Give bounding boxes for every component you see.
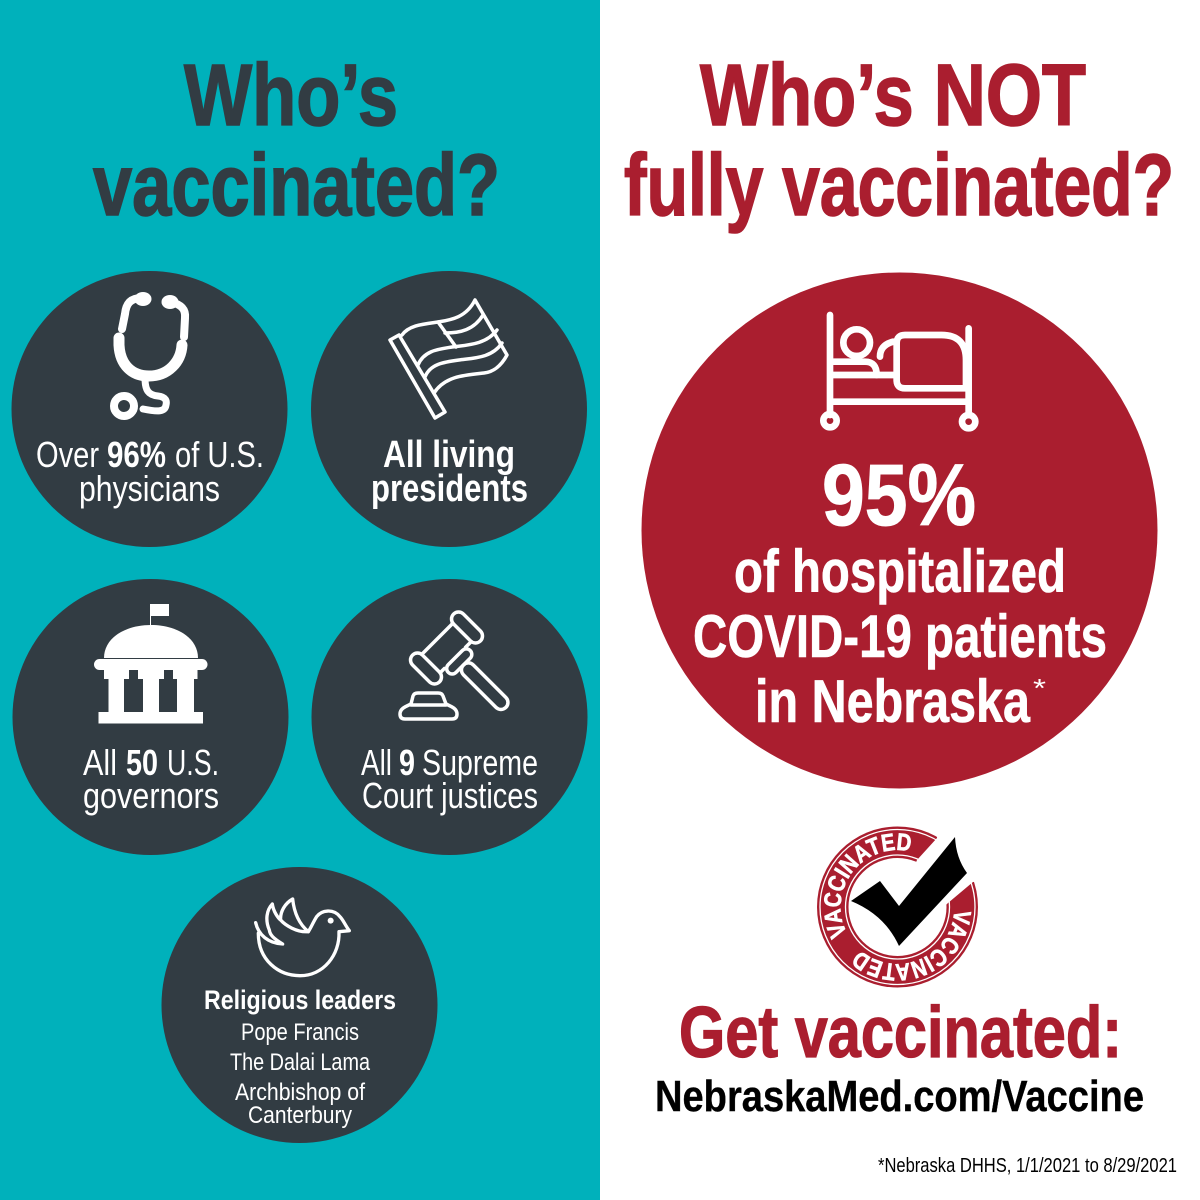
- text: all 9 supreme court justices: Court justices: [362, 775, 538, 816]
- text: all living presidents: presidents: [371, 468, 528, 510]
- text: religious leaders list: Religious leaders: [204, 985, 396, 1015]
- text: all 50 U.S. governors: All: [83, 742, 117, 783]
- text: all 9 supreme court justices: Supreme: [422, 742, 538, 783]
- text: all living presidents: All living: [383, 434, 515, 476]
- text: over 96% of U.S. physicians: Over: [36, 434, 99, 475]
- icon: flag: [390, 300, 507, 418]
- text: of hospitalized COVID-19 patients in Nebraska: [693, 538, 1107, 735]
- text: all 50 U.S. governors: 50: [126, 742, 158, 783]
- icon: vaccinated stamp: VACCINATED: [853, 912, 972, 981]
- text: all 9 supreme court justices: [361, 742, 538, 816]
- icon: vaccinated stamp: VACCINATED: [824, 833, 911, 940]
- text: all 50 U.S. governors: U.S.: [167, 742, 219, 783]
- text: religious leaders list: Pope Francis: [241, 1019, 359, 1046]
- text: religious leaders list: Archbishop of: [235, 1079, 365, 1106]
- text: religious leaders list: The Dalai Lama: [230, 1049, 371, 1076]
- text: over 96% of U.S. physicians: of U.S.: [175, 434, 264, 475]
- text: all 9 supreme court justices: 9: [399, 742, 415, 783]
- icon: gavel: [400, 609, 531, 733]
- text: over 96% of U.S. physicians: 96%: [107, 434, 166, 475]
- text: all living presidents: [371, 434, 528, 510]
- panel: governors: [12, 579, 288, 855]
- panel: religious leaders: [162, 867, 438, 1143]
- text: religious leaders list: Canterbury: [248, 1102, 352, 1129]
- icon: capitol building: [94, 604, 208, 724]
- title: Who's NOT fully vaccinated?: [624, 47, 1174, 234]
- text: of hospitalized COVID-19 patients in Nebraska: of hospitalized: [734, 538, 1066, 605]
- icon: hospital bed: [823, 315, 975, 428]
- icon: vaccinated stamp: [817, 826, 978, 988]
- panel: presidents: [311, 271, 587, 547]
- title: Who's NOT fully vaccinated?: Who’s NOT: [700, 47, 1086, 144]
- icon: stethoscope: [114, 292, 185, 416]
- panel: physicians: [12, 271, 288, 547]
- panel: 95% of hospitalized patients: [642, 272, 1158, 788]
- title: Who's vaccinated?: Who’s: [184, 47, 398, 144]
- text: over 96% of U.S. physicians: [36, 434, 264, 509]
- icon: dove: [256, 899, 349, 976]
- text: of hospitalized COVID-19 patients in Nebraska: *: [1033, 673, 1046, 703]
- text: over 96% of U.S. physicians: physicians: [79, 468, 220, 509]
- title: Who's vaccinated?: [93, 47, 500, 234]
- panel: supreme court justices: [312, 579, 588, 855]
- panel: who's vaccinated (teal): [0, 0, 600, 1200]
- stat: 95%: 95%: [822, 447, 976, 544]
- text: religious leaders list: [204, 985, 396, 1129]
- icon: check mark: [851, 837, 967, 946]
- text: all 50 U.S. governors: governors: [83, 775, 219, 816]
- text: of hospitalized COVID-19 patients in Nebraska: in Nebraska: [755, 668, 1031, 735]
- text: get vaccinated: Get vaccinated:: [679, 993, 1122, 1073]
- text: all 50 U.S. governors: [83, 742, 219, 816]
- title: Who's vaccinated?: vaccinated?: [93, 137, 500, 234]
- text: all 9 supreme court justices: All: [361, 742, 392, 783]
